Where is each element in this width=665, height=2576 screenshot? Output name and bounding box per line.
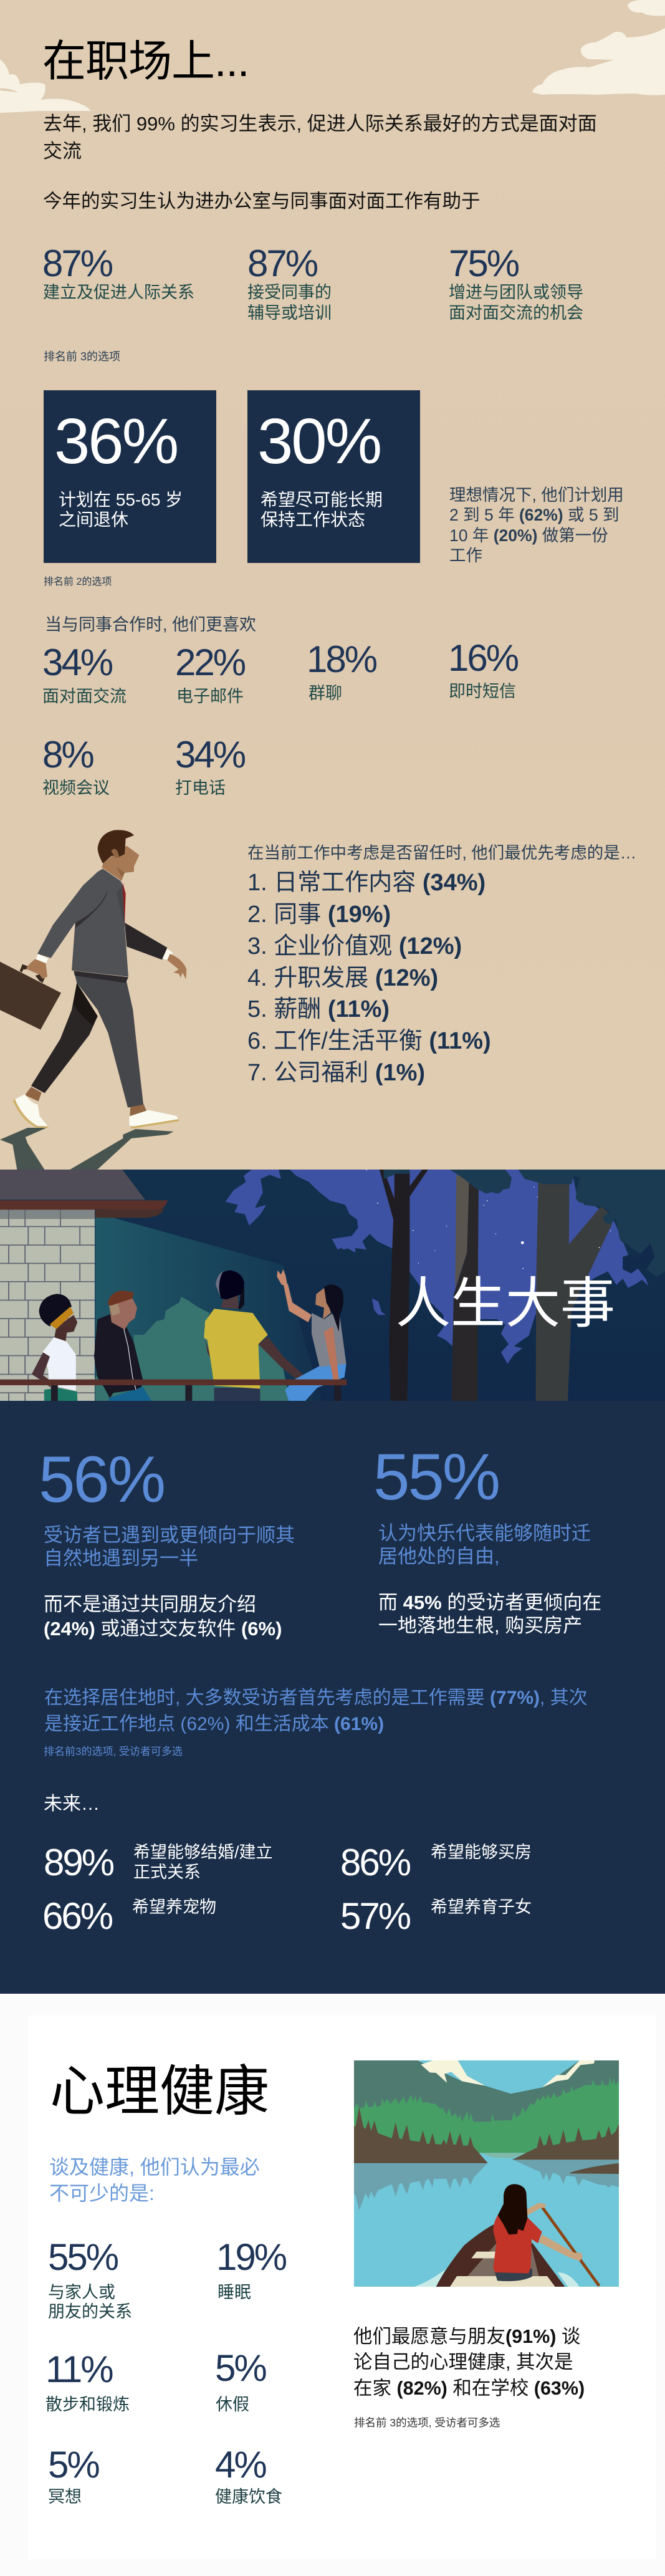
- footnote: 排名前 2的选项: [44, 577, 112, 587]
- stat: 86% buy a home: [340, 1842, 532, 1883]
- stat: 57% children: 希望养育子女: [431, 1898, 532, 1916]
- sky: [290, 1170, 648, 1364]
- stat: 19% sleep: 睡眠: [218, 2283, 251, 2302]
- intro text: 去年, 我们 99% 的实习生表示, 促进人际关系最好的方式是面对面: [43, 113, 597, 135]
- panel: mental health: [0, 1994, 665, 2576]
- panel: life events stats: [0, 1401, 665, 1994]
- person: pointing woman: [285, 1364, 347, 1401]
- trunks: [380, 1170, 409, 1401]
- card: 30%: 希望尽可能长期: [261, 490, 383, 509]
- stars: [366, 1170, 611, 1269]
- stat: 55% relationships: [48, 2236, 132, 2321]
- stat: 5% meditation: 5%: [48, 2444, 98, 2486]
- panel: night scene illustration: [0, 1170, 665, 1401]
- stat: 66% pet: 希望养宠物: [132, 1898, 216, 1916]
- stat: 87% relationships: 87%: [42, 243, 112, 284]
- ranked list: 5. 薪酬 (11%): [247, 996, 390, 1022]
- text: where to live: 在选择居住地时, 大多数受访者首先考虑的是工作需要 (77%), 其次: [44, 1688, 588, 1708]
- stat: 57% children: [340, 1895, 532, 1937]
- stat: 5% vacation: [215, 2347, 266, 2414]
- subheading: 今年的实习生认为进办公室与同事面对面工作有助于: [43, 191, 480, 212]
- stat: 86% buy a home: 86%: [340, 1842, 409, 1883]
- person: yellow shirt man: [214, 1388, 260, 1401]
- icon: walking businessman: [0, 830, 187, 1170]
- ranked list: 1. 日常工作内容 (34%): [247, 870, 486, 896]
- stat: 55%: 一地落地生根, 购买房产: [378, 1615, 582, 1636]
- stat: 22% email: 电子邮件: [176, 687, 244, 706]
- card: 36%: 计划在 55-65 岁: [59, 490, 183, 509]
- stat: 34% face to face: 34%: [42, 642, 112, 683]
- stat: 89% marriage: 89%: [44, 1842, 113, 1883]
- dark tree blue gap: [226, 1170, 281, 1226]
- stat: 56%: (24%) 或通过交友软件 (6%): [44, 1618, 282, 1640]
- stat: 89% marriage: 希望能够结婚/建立: [133, 1843, 273, 1862]
- inner white card: [28, 2016, 656, 2559]
- stat: 8% video: 8%: [42, 734, 93, 776]
- side note: first job: 2 到 5 年 (62%) 或 5 到: [449, 506, 619, 524]
- stat: 66% pet: [42, 1895, 216, 1937]
- side note: first job: 10 年 (20%) 做第一份: [449, 526, 608, 545]
- card: 30%: 30%: [257, 405, 380, 477]
- stat: 34% phone: 打电话: [175, 779, 226, 797]
- side note: first job: [449, 486, 624, 565]
- stat: 55% relationships: 55%: [48, 2236, 117, 2278]
- ranked list: 2. 同事 (19%): [247, 901, 391, 928]
- side note: first job: 工作: [449, 546, 482, 565]
- light beam: [95, 1218, 322, 1401]
- card: 36%: [44, 390, 216, 563]
- ranked list: 3. 企业价值观 (12%): [247, 933, 462, 959]
- canopy: [384, 1170, 665, 1277]
- title: 心理健康: [50, 2060, 269, 2122]
- stat: 75% leadership: 增进与团队或领导: [449, 283, 583, 302]
- stat: 87% mentoring: [247, 243, 332, 322]
- stat: 8% video: 视频会议: [42, 779, 110, 797]
- stat: 55%: 居他处的自由,: [378, 1545, 500, 1567]
- panel: at work: [0, 0, 665, 1170]
- stat: 22% email: [175, 642, 245, 706]
- side note: first job: 理想情况下, 他们计划用: [449, 486, 624, 504]
- stat: 87% mentoring: 接受同事的: [247, 283, 332, 302]
- intro text: 谈及健康, 他们认为最必: [49, 2156, 260, 2178]
- stat: 56%: 受访者已遇到或更倾向于顺其: [44, 1524, 295, 1546]
- stat: 55%: [373, 1441, 601, 1636]
- stat: 4% healthy diet: 健康饮食: [215, 2487, 282, 2506]
- stat: 75% leadership: [449, 243, 583, 322]
- stat: 55% relationships: 朋友的关系: [48, 2302, 132, 2321]
- stat: 75% leadership: 面对面交流的机会: [449, 304, 583, 322]
- stat: 18% group chat: 群聊: [309, 684, 342, 703]
- stat: 56%: [39, 1443, 295, 1640]
- stat: 18% group chat: [307, 638, 376, 703]
- section title: life events: 人生大事: [396, 1272, 615, 1334]
- stat: 55% relationships: 与家人或: [48, 2283, 115, 2302]
- stat: 55%: 认为快乐代表能够随时迁: [378, 1522, 591, 1544]
- stat: 11% exercise: 11%: [45, 2348, 112, 2390]
- stat: 66% pet: 66%: [42, 1895, 112, 1937]
- card: 36%: 之间退休: [59, 510, 128, 529]
- stat: 16% instant messaging: 16%: [448, 637, 517, 679]
- railing: [51, 1385, 58, 1401]
- stat: 11% exercise: 散步和锻炼: [45, 2395, 130, 2414]
- stat: 22% email: 22%: [175, 642, 244, 683]
- person: headband woman: [44, 1388, 77, 1401]
- stat: 19% sleep: 19%: [216, 2236, 285, 2278]
- stat: 75% leadership: 75%: [449, 243, 518, 284]
- stat: 5% vacation: 5%: [215, 2347, 266, 2389]
- stat: 89% marriage: [44, 1842, 273, 1883]
- title: 在职场上...: [42, 37, 249, 85]
- card: 30%: 保持工作状态: [261, 510, 365, 529]
- stat: 4% healthy diet: 4%: [215, 2444, 266, 2486]
- stat: 34% face to face: 面对面交流: [42, 687, 127, 706]
- person: hoodie man: [109, 1387, 152, 1401]
- ranked list: 6. 工作/生活平衡 (11%): [247, 1028, 491, 1054]
- stat: 55%: 55%: [373, 1441, 499, 1514]
- card: 30%: [247, 390, 420, 563]
- intro text: 交流: [43, 140, 82, 162]
- stat: 5% meditation: [48, 2444, 99, 2506]
- icon: clouds: [0, 0, 665, 113]
- stat: 19% sleep: [216, 2236, 286, 2302]
- subheading: colleagues: 当与同事合作时, 他们更喜欢: [45, 615, 256, 634]
- stat: 87% relationships: [42, 243, 194, 302]
- illustration: woman canoeing on lake: [354, 2060, 619, 2287]
- stat: 18% group chat: 18%: [307, 638, 376, 680]
- stat: 89% marriage: 正式关系: [133, 1863, 201, 1882]
- stat: 8% video: [42, 734, 110, 797]
- question heading: 在当前工作中考虑是否留任时, 他们最优先考虑的是…: [247, 843, 636, 862]
- ranked list: [247, 870, 491, 1086]
- text: who they talk to: 论自己的心理健康, 其次是: [353, 2352, 573, 2373]
- stat: 87% mentoring: 87%: [247, 243, 317, 284]
- intro text: [49, 2156, 260, 2204]
- text: who they talk to: 他们最愿意与朋友(91%) 谈: [353, 2326, 580, 2347]
- bush: [95, 1297, 290, 1401]
- ranked list: 4. 升职发展 (12%): [247, 965, 438, 991]
- stat: 5% meditation: 冥想: [48, 2487, 82, 2506]
- footnote: 排名前3的选项, 受访者可多选: [44, 1746, 183, 1757]
- stat: 56%: 56%: [39, 1443, 164, 1516]
- intro text: [43, 113, 597, 162]
- stat: 5% vacation: 休假: [216, 2395, 249, 2414]
- footnote: 排名前 3的选项, 受访者可多选: [354, 2416, 500, 2429]
- text: where to live: [44, 1688, 588, 1734]
- text: who they talk to: 在家 (82%) 和在学校 (63%): [353, 2378, 585, 2399]
- stat: 86% buy a home: 希望能够买房: [431, 1843, 532, 1862]
- stat: 55%: 而 45% 的受访者更倾向在: [378, 1592, 601, 1613]
- stat: 87% mentoring: 辅导或培训: [247, 304, 332, 322]
- stat: 16% instant messaging: [448, 637, 518, 701]
- stat: 4% healthy diet: [215, 2444, 282, 2506]
- ranked list: 7. 公司福利 (1%): [247, 1060, 425, 1086]
- subheading: future: 未来…: [44, 1794, 100, 1814]
- text: who they talk to: [353, 2326, 585, 2399]
- roof and wall: [0, 1170, 145, 1199]
- stat: 16% instant messaging: 即时短信: [449, 682, 516, 701]
- stat: 56%: 而不是通过共同朋友介绍: [44, 1593, 256, 1615]
- intro text: 不可少的是:: [49, 2182, 155, 2204]
- stat: 56%: 自然地遇到另一半: [44, 1547, 198, 1569]
- card: 36%: 36%: [54, 405, 177, 477]
- stat: 34% face to face: [42, 642, 127, 706]
- stat: 34% phone: 34%: [175, 734, 244, 776]
- stat: 87% relationships: 建立及促进人际关系: [43, 283, 194, 302]
- stat: 11% exercise: [45, 2348, 130, 2414]
- text: where to live: 是接近工作地点 (62%) 和生活成本 (61%): [44, 1714, 384, 1734]
- stat: 34% phone: [175, 734, 245, 797]
- stat: 57% children: 57%: [340, 1895, 409, 1937]
- footnote: 排名前 3的选项: [44, 350, 120, 363]
